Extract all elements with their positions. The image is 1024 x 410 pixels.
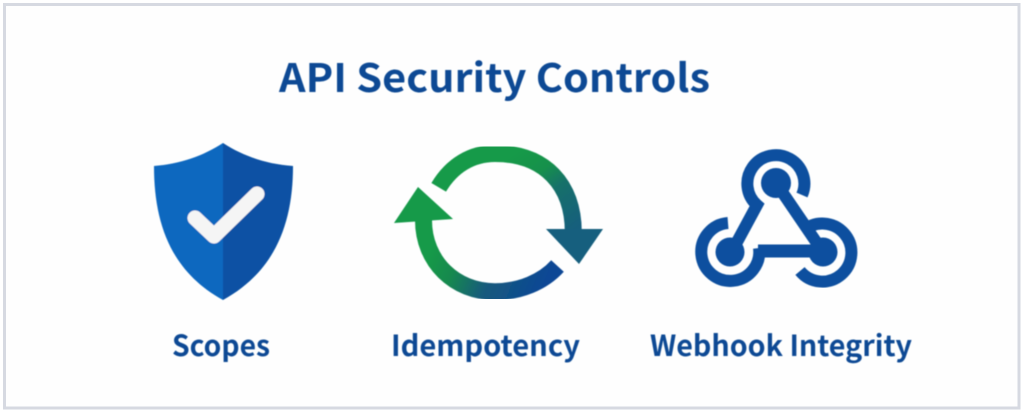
icon: circular arrows (394, 154, 603, 292)
label: scopes: Scopes (172, 323, 270, 365)
label: idempotency: Idempotency (391, 323, 580, 365)
icon: shield with check (154, 143, 293, 300)
title: API Security Controls (278, 48, 710, 104)
label: webhook integrity: Webhook Integrity (650, 323, 912, 365)
icon: webhook nodes (701, 155, 851, 282)
